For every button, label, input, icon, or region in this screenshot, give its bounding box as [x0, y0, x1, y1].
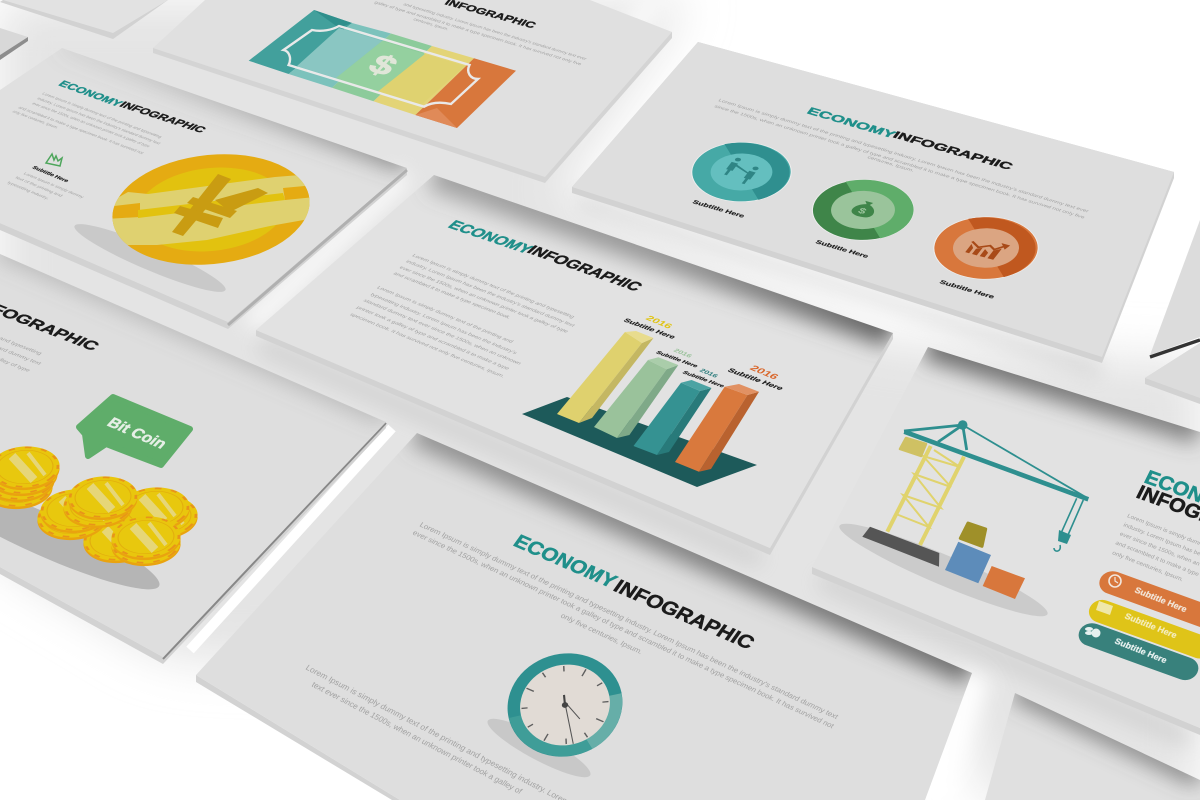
panel: bottom-right slide fragment: [985, 689, 1200, 800]
panel: 3D bar chart slide: [256, 171, 893, 555]
panel: three circles slide: [572, 42, 1174, 363]
title: bar chart slide: ECONOMY: [444, 218, 537, 256]
text block: three circles intro: since the 1500s, when an unknown printer took a galley of type and scrambled it to make a type specimen book. It has survived not only five: [713, 104, 1086, 220]
label: orange circle: Subtitle Here: [938, 280, 995, 300]
bar: orange: [675, 384, 759, 472]
icon: gold coin piles: [0, 438, 211, 574]
text block: bar chart paragraph two: standard dummy text ever since the 1500s, when an unknown: [362, 299, 522, 366]
text block: yen slide: ever since the 1500s, when an unknown printer took a galley of type: [30, 102, 151, 149]
crane boom: [904, 425, 1088, 551]
panel: banknote slide: [153, 0, 672, 183]
text block: clock intro: ever since the 1500s, when an unknown printer took a galley of type and scrambled it to make a type specimen book. It has survived not: [411, 529, 836, 730]
panel: clock slide: [196, 428, 972, 800]
panel: right slide fragment: [1145, 343, 1200, 404]
text block: bar chart paragraph two: specimen book. It has survived not only five centuries, Ipsum.: [348, 313, 506, 379]
icon: olive box: [960, 523, 986, 546]
crane tower: [887, 446, 964, 545]
label: orange bar: Subtitle Here: [726, 367, 786, 392]
panel: bit coin slide: [0, 246, 386, 664]
text block: bar chart paragraph one: industry. Lorem Ipsum has been the industry's standard dummy text: [404, 260, 576, 328]
icon: small green chart: [46, 154, 62, 166]
text block: clock intro: Lorem Ipsum is simply dummy text of the printing and typesetting industry. Lorem Ipsum has been the industry's standard dummy text: [418, 521, 841, 721]
title: yen slide: INFOGRAPHIC: [117, 100, 209, 135]
label: green bar: Subtitle Here: [654, 350, 700, 369]
button: orange pill: Subtitle Here: [1133, 585, 1189, 614]
label: yellow bar: 2016: [643, 315, 675, 331]
label: green bar: 2016: [672, 348, 694, 359]
text block: yen slide: [11, 92, 163, 156]
panel: top-right slide fragment: [1150, 220, 1200, 357]
icon: yen coin shadow: [70, 215, 230, 301]
shadow: crane ground: [834, 512, 1053, 628]
icon: crane: [862, 420, 1088, 567]
subtitle block: yen slide: Lorem Ipsum is simply dummy: [22, 172, 85, 200]
icon: orange box: [983, 566, 1025, 599]
title: three circles slide: ECONOMY: [804, 105, 899, 140]
text block: banknote slide: centuries, Ipsum.: [412, 17, 450, 32]
subtitle block: yen slide: Subtitle Here: [30, 165, 70, 184]
text block: yen slide: Lorem Ipsum is simply dummy text of the printing and typesetting: [40, 92, 163, 139]
label: teal circle: Subtitle Here: [691, 200, 746, 219]
panel: far-left slide fragment: [0, 28, 28, 60]
icon: clock: [487, 636, 643, 774]
text block: yen slide: and scrambled it to make a type specimen book. It has survived not: [17, 106, 145, 156]
crane counterweight: [900, 438, 926, 456]
title: three circles slide: [804, 105, 1016, 172]
panel: yen coin slide: [0, 40, 407, 329]
text block: yen slide: industry. Lorem Ipsum has been the industry's standard dummy text: [35, 97, 162, 146]
title: yen slide: [56, 79, 209, 135]
label: green circle: Subtitle Here: [814, 240, 870, 259]
label: yellow bar: Subtitle Here: [622, 317, 678, 340]
title: clock slide: ECONOMY: [509, 531, 621, 592]
subtitle block: yen slide: text of the printing and: [14, 176, 64, 198]
text block: bar chart paragraph one: Lorem Ipsum is simply dummy text of the printing and typesetting: [410, 254, 575, 319]
icon: orange circle with growth chart: [917, 207, 1055, 289]
bar: green: [594, 357, 678, 438]
label: teal bar: Subtitle Here: [681, 370, 726, 389]
text block: banknote slide: and typesetting industry. Lorem Ipsum has been the industry's standard dummy text ever: [402, 2, 588, 61]
button: yellow pill: [1085, 596, 1200, 662]
text block: bar chart paragraph two: typesetting industry. Lorem Ipsum has been the industry's: [369, 293, 518, 355]
title: clock slide: INFOGRAPHIC: [609, 576, 759, 653]
label: teal bar: 2016: [698, 368, 720, 379]
bar: yellow: [557, 331, 654, 423]
icon: green circle with money bag: $: [856, 206, 868, 216]
chart: banknote graphic: $: [361, 49, 405, 82]
bar: teal: [634, 380, 712, 455]
text block: bar chart paragraph one: and scrambled it to make a type specimen book.: [392, 272, 512, 320]
title: bar chart slide: [444, 218, 646, 294]
label: orange bar: 2016: [747, 364, 781, 381]
icon: teal circle with handshake: [675, 133, 808, 211]
title: clock slide: [509, 531, 759, 653]
shadow: coins: [0, 465, 168, 605]
title: bar chart slide: INFOGRAPHIC: [523, 243, 646, 294]
button: teal pill: [1074, 620, 1200, 684]
button: teal pill: Subtitle Here: [1113, 636, 1169, 665]
icon: blue box: [945, 542, 991, 583]
panel: top-left slide fragment: [0, 0, 168, 39]
icon: speech bubble: Bit Coin: [103, 415, 171, 452]
icon: speech bubble: [79, 397, 190, 465]
text block: bar chart paragraph one: ever since the 1500s, when an unknown printer took a galley of type: [398, 266, 570, 334]
text block: three circles intro: Lorem Ipsum is simply dummy text of the printing and typesetting industry. Lorem Ipsum has been the industry's standard dummy text ever: [717, 98, 1090, 214]
text block: crane slide: only five centuries, Ipsum.: [1111, 551, 1184, 583]
text block: three circles intro: centuries, Ipsum.: [866, 155, 915, 173]
text block: banknote slide: galley of type and scrambled it to make a type specimen book. It has survived not only five: [373, 0, 583, 67]
text block: bar chart paragraph two: printer took a galley of type and scrambled it to make a type: [355, 306, 511, 371]
icon: yen coin: [112, 154, 310, 265]
shadow: clock: [482, 710, 596, 786]
title: yen slide: ECONOMY: [56, 79, 126, 109]
chart: 3D bars: [522, 331, 759, 487]
icon: green circle with money bag: [796, 170, 930, 250]
text block: bar chart paragraph two: Lorem Ipsum is simply dummy text of the printing and: [375, 286, 514, 344]
crane base: [862, 527, 939, 567]
button: orange pill: [1095, 568, 1200, 633]
text block: yen slide: only five centuries, Ipsum.: [11, 110, 60, 130]
panel: crane slide: [812, 341, 1200, 735]
subtitle block: yen slide: typesetting industry.: [6, 181, 50, 201]
title: banknote slide: [390, 0, 539, 30]
button: yellow pill: Subtitle Here: [1123, 611, 1179, 640]
title: three circles slide: INFOGRAPHIC: [890, 129, 1016, 172]
subtitle block: yen slide: [6, 165, 85, 201]
text block: clock intro: only five centuries, Ipsum.: [559, 612, 644, 656]
chart: banknote graphic: [249, 10, 516, 128]
